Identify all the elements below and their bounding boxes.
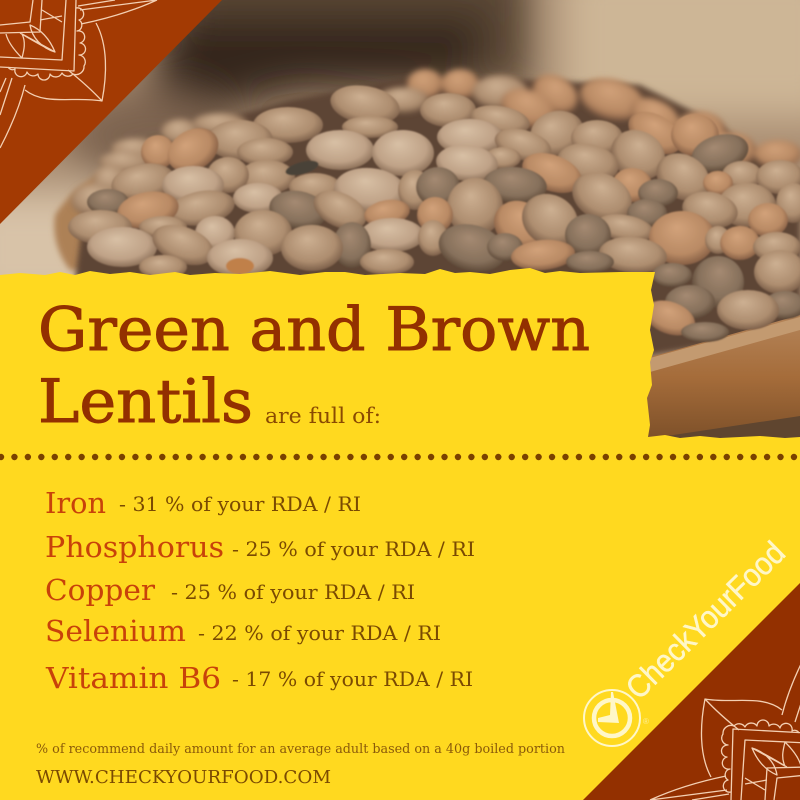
title: Lentils [38, 367, 253, 437]
nutrient: vitamin b6: Vitamin B6 [45, 661, 221, 695]
top-left corner triangle with mandala [0, 0, 222, 224]
sharp lentils [68, 80, 800, 342]
nutrient: phosphorus: Phosphorus [45, 530, 224, 564]
nutrient list [45, 486, 475, 695]
website: WWW.CHECKYOURFOOD.COM [36, 767, 331, 788]
registered mark: ® [643, 717, 649, 726]
photo: lentils on a wooden spoon [0, 0, 800, 445]
nutrient: phosphorus [45, 530, 475, 564]
title [38, 295, 590, 437]
footnote: % of recommend daily amount for an average adult based on a 40g boiled portion [36, 742, 566, 757]
nutrient: selenium: - 22 % of your RDA / RI [198, 621, 441, 645]
nutrient: iron: Iron [45, 486, 106, 520]
nutrient: copper: - 25 % of your RDA / RI [171, 580, 415, 604]
nutrient: selenium: Selenium [45, 614, 186, 648]
nutrient: phosphorus: - 25 % of your RDA / RI [232, 537, 475, 561]
blurred back row of lentils [71, 66, 800, 217]
nutrient: vitamin b6: - 17 % of your RDA / RI [232, 667, 473, 691]
icon: clock [584, 690, 640, 746]
nutrient: copper: Copper [45, 573, 155, 607]
nutrient: vitamin b6 [45, 661, 473, 695]
dotted divider [1, 454, 800, 460]
bottom-right corner triangle with mandala [583, 583, 800, 800]
title: Green and Brown [38, 295, 590, 365]
nutrient: selenium [45, 614, 441, 648]
nutrient: iron [45, 486, 361, 520]
subtitle: are full of: [265, 404, 381, 428]
nutrient: iron: - 31 % of your RDA / RI [119, 492, 361, 516]
nutrient: copper [45, 573, 415, 607]
logo: CheckYourFood [584, 534, 792, 746]
yellow torn-paper panel [0, 268, 800, 800]
